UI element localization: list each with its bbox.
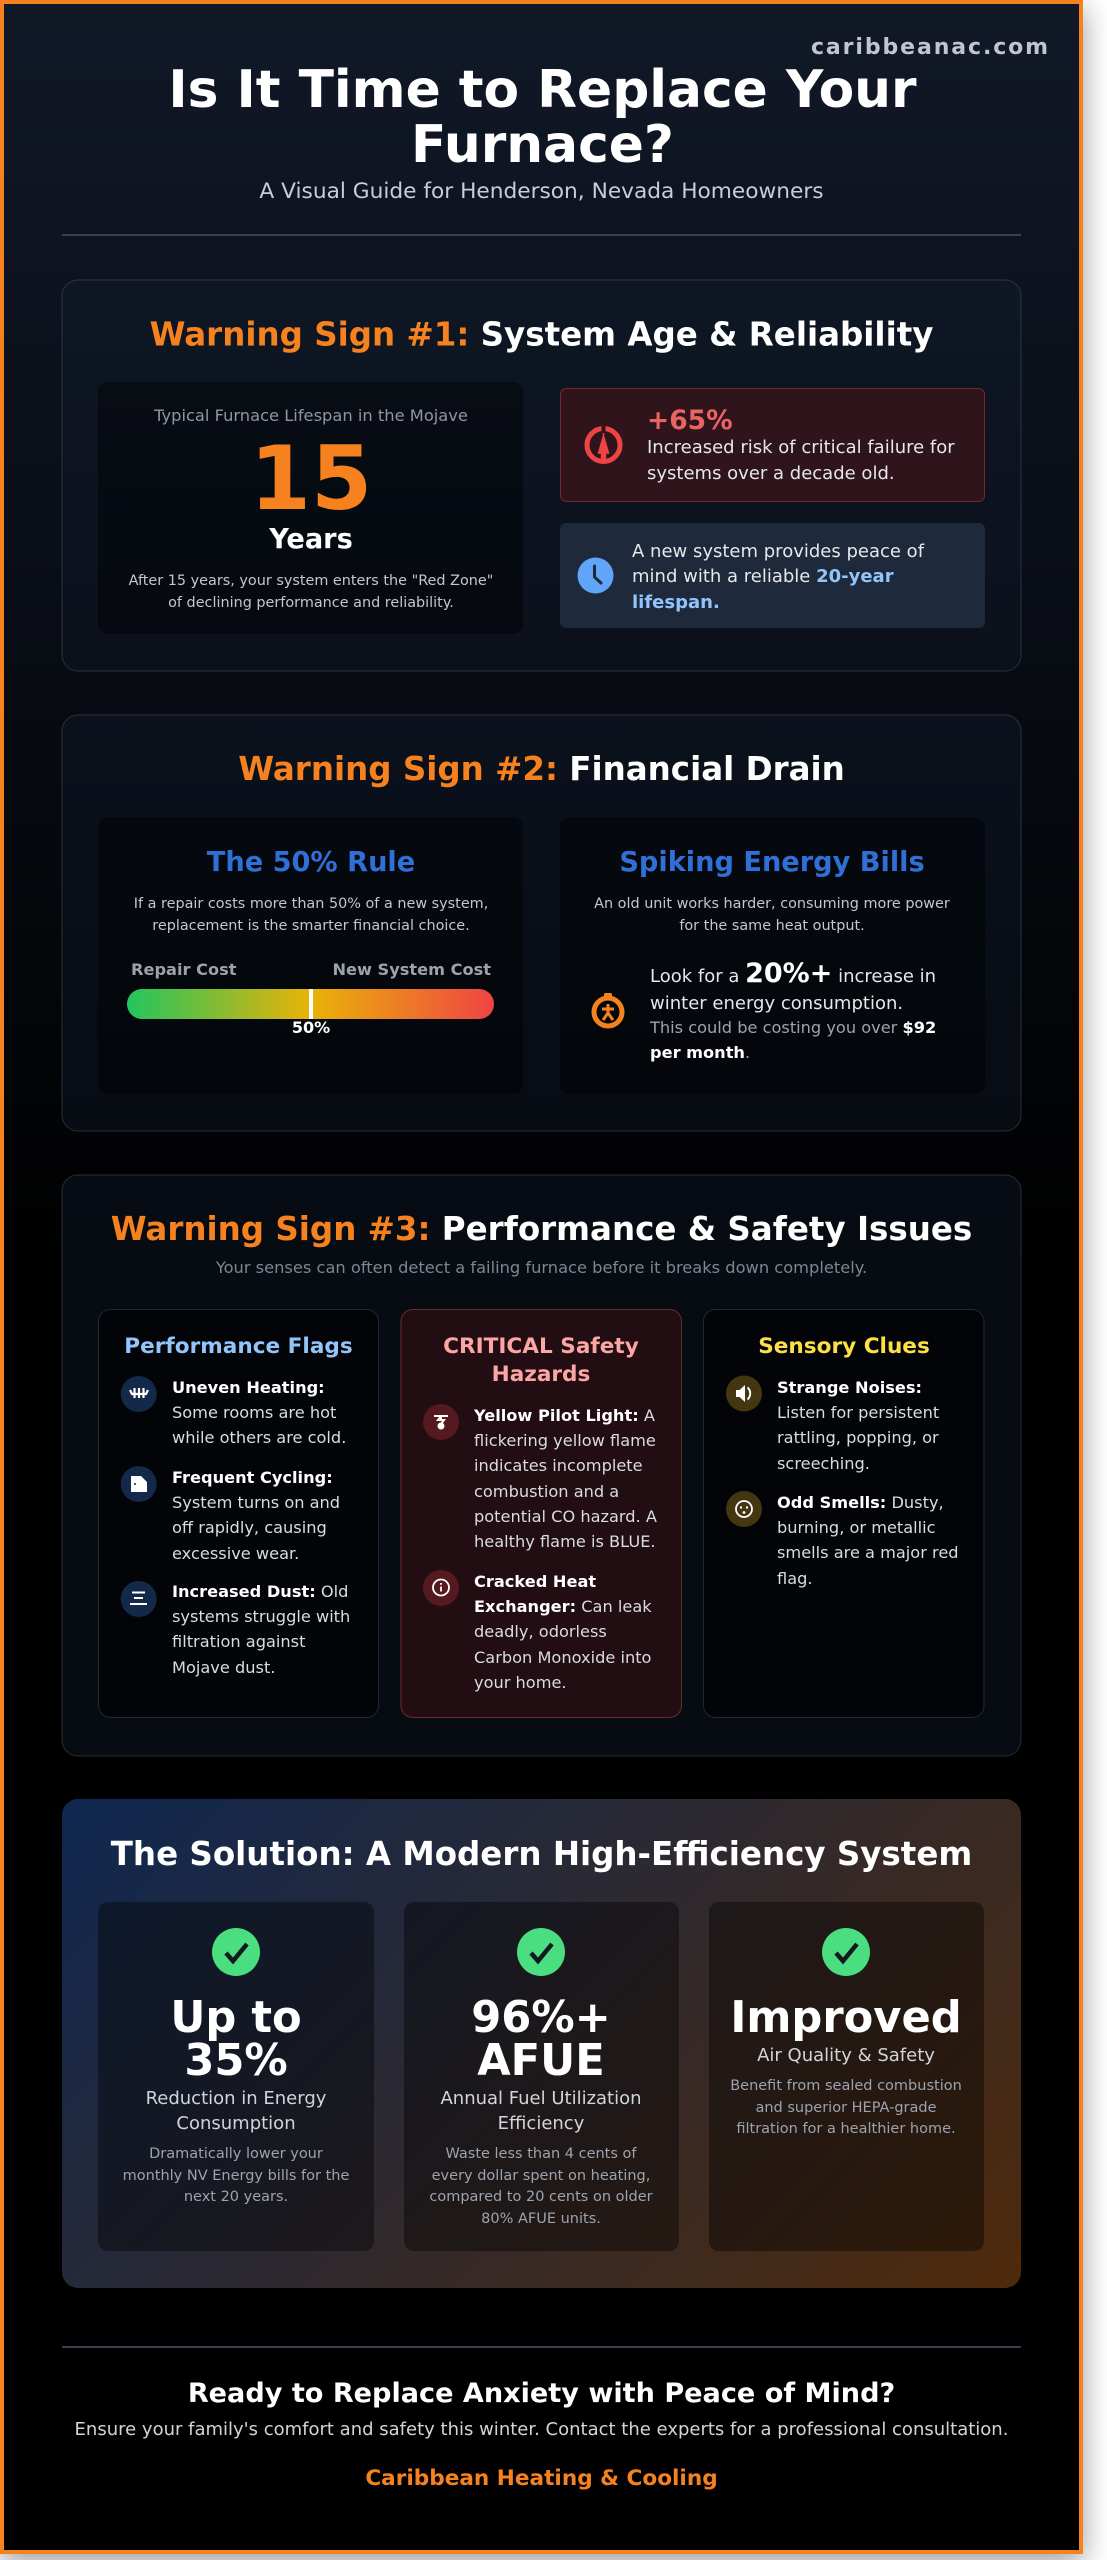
card: furnace lifespan: Years	[268, 524, 353, 555]
card: AFUE: 96%+	[471, 1993, 611, 2043]
item: odd smells: Odd Smells: Dusty,	[777, 1493, 944, 1512]
item: uneven heating: while others are cold.	[172, 1428, 346, 1447]
card: AFUE: Annual Fuel Utilization	[440, 2088, 642, 2109]
item: yellow pilot light: flickering yellow flame	[474, 1431, 656, 1450]
heading: warning sign 1: Warning Sign #1: System Age & Reliability	[150, 316, 933, 354]
card: performance flags	[98, 1310, 378, 1718]
card: furnace lifespan	[98, 382, 523, 634]
big number 15: 15	[250, 427, 372, 530]
heading: warning sign 3: Warning Sign #3: Performance & Safety Issues	[111, 1210, 972, 1248]
item: frequent cycling: Frequent Cycling:	[172, 1468, 333, 1487]
icon: check	[822, 1928, 870, 1976]
card: AFUE	[404, 1902, 679, 2251]
card: critical safety hazards	[401, 1310, 682, 1718]
item: increased dust: filtration against	[172, 1632, 305, 1651]
card: spiking energy bills	[560, 817, 985, 1094]
item: increased dust	[121, 1581, 350, 1677]
item: frequent cycling: off rapidly, causing	[172, 1518, 327, 1537]
item: cracked heat exchanger: Exchanger: Can leak	[474, 1597, 652, 1616]
item: increased dust: Mojave dust.	[172, 1658, 275, 1677]
item: odd smells: burning, or metallic	[777, 1518, 936, 1537]
card: energy reduction: Reduction in Energy	[146, 2088, 327, 2109]
footer call to action: Ensure your family's comfort and safety this winter. Contact the experts for a professional consultation.	[75, 2419, 1008, 2440]
card: performance flags: Performance Flags	[124, 1334, 353, 1359]
card: energy reduction: Up to	[170, 1993, 302, 2043]
callout: 20-year lifespan	[560, 523, 985, 628]
card: AFUE: AFUE	[477, 2036, 605, 2086]
card: spiking energy bills: An old unit works harder, consuming more power	[594, 896, 950, 912]
item: yellow pilot light: potential CO hazard. A	[474, 1507, 657, 1526]
item: strange noises: Listen for persistent	[777, 1403, 939, 1422]
card: spiking energy bills: per month.	[650, 1043, 750, 1062]
card: energy reduction	[98, 1902, 374, 2251]
item: yellow pilot light: indicates incomplete	[474, 1456, 643, 1475]
item: frequent cycling	[121, 1466, 340, 1563]
cost bar chart: Repair Cost	[131, 960, 237, 979]
item: yellow pilot light: combustion and a	[474, 1482, 619, 1501]
card: AFUE: every dollar spent on heating,	[432, 2168, 650, 2184]
card: air quality: and superior HEPA-grade	[755, 2100, 937, 2116]
cost bar chart: 50%	[292, 1018, 330, 1037]
card: air quality: Improved	[730, 1993, 962, 2043]
item: odd smells: smells are a major red	[777, 1543, 959, 1562]
item: odd smells: flag.	[777, 1569, 813, 1588]
item: frequent cycling: excessive wear.	[172, 1544, 299, 1563]
footer call to action	[75, 2378, 1008, 2491]
icon: check	[212, 1928, 260, 1976]
website label: caribbeanac.com	[811, 35, 1050, 60]
heading: warning sign 2: Warning Sign #2: Financial Drain	[238, 750, 845, 788]
panel: warning sign 2	[62, 715, 1021, 1131]
item: cracked heat exchanger: deadly, odorless	[474, 1622, 607, 1641]
card: energy reduction: Dramatically lower your	[149, 2146, 323, 2162]
item: strange noises	[726, 1376, 939, 1473]
item: cracked heat exchanger	[423, 1570, 652, 1692]
card: the 50% rule	[98, 817, 523, 1094]
callout: +65% failure risk: systems over a decade old.	[647, 463, 895, 484]
card: air quality	[709, 1902, 984, 2251]
card: air quality: Benefit from sealed combustion	[730, 2078, 962, 2094]
card: AFUE: 80% AFUE units.	[481, 2211, 601, 2227]
panel: warning sign 1	[62, 280, 1021, 671]
footer call to action: Ready to Replace Anxiety with Peace of Mind?	[188, 2378, 895, 2409]
panel: warning sign 3	[62, 1175, 1021, 1756]
card: AFUE: compared to 20 cents on older	[429, 2189, 653, 2205]
item: uneven heating	[121, 1376, 346, 1447]
card: the 50% rule: The 50% Rule	[207, 847, 415, 878]
item: cracked heat exchanger: your home.	[474, 1673, 567, 1692]
card: AFUE: Waste less than 4 cents of	[445, 2146, 637, 2162]
card: spiking energy bills: Look for a 20%+ increase in	[650, 958, 936, 989]
icon: check	[517, 1928, 565, 1976]
item: increased dust: Increased Dust: Old	[172, 1582, 348, 1601]
card: furnace lifespan: After 15 years, your system enters the "Red Zone"	[129, 573, 493, 589]
company name: Caribbean Heating & Cooling	[365, 2466, 718, 2491]
item: yellow pilot light: Yellow Pilot Light: A	[473, 1406, 655, 1425]
item: odd smells	[726, 1491, 959, 1588]
subtitle: A Visual Guide for Henderson, Nevada Homeowners	[259, 179, 824, 204]
callout: 20-year lifespan: A new system provides peace of	[632, 541, 925, 562]
card: spiking energy bills: This could be costing you over $92	[649, 1018, 936, 1037]
callout: +65% failure risk: +65%	[647, 405, 733, 436]
callout: +65% failure risk	[560, 388, 984, 502]
item: yellow pilot light	[423, 1404, 657, 1551]
heading: the solution: The Solution: A Modern High-Efficiency System	[111, 1835, 972, 1873]
card: furnace lifespan: Typical Furnace Lifespan in the Mojave	[153, 406, 468, 425]
card: the 50% rule: replacement is the smarter financial choice.	[152, 918, 470, 934]
card: spiking energy bills: Spiking Energy Bills	[619, 847, 925, 878]
card: sensory clues: Sensory Clues	[758, 1334, 930, 1359]
item: uneven heating: Some rooms are hot	[172, 1403, 336, 1422]
item: strange noises: rattling, popping, or	[777, 1428, 939, 1447]
card: energy reduction: Consumption	[176, 2113, 296, 2134]
title: Furnace?	[411, 115, 674, 175]
cost bar chart: New System Cost	[332, 960, 491, 979]
callout: +65% failure risk: Increased risk of critical failure for	[647, 437, 955, 458]
item: increased dust: systems struggle with	[172, 1607, 350, 1626]
item: strange noises: screeching.	[777, 1454, 870, 1473]
item: yellow pilot light: healthy flame is BLUE.	[474, 1532, 656, 1551]
card: energy reduction: next 20 years.	[184, 2189, 288, 2205]
card: energy reduction: 35%	[184, 2036, 288, 2086]
card: spiking energy bills: winter energy consumption.	[650, 993, 903, 1014]
panel: the solution	[62, 1799, 1021, 2288]
card: critical safety hazards: CRITICAL Safety	[443, 1334, 639, 1359]
icon: clock	[578, 558, 614, 594]
callout: 20-year lifespan: lifespan.	[632, 592, 720, 613]
item: uneven heating: Uneven Heating:	[172, 1378, 325, 1397]
card: air quality: filtration for a healthier home.	[736, 2121, 956, 2137]
icon: meter	[594, 993, 622, 1026]
card: sensory clues	[704, 1310, 984, 1718]
item: frequent cycling: System turns on and	[172, 1493, 340, 1512]
callout: 20-year lifespan: mind with a reliable 20-year	[632, 566, 894, 587]
item: cracked heat exchanger: Carbon Monoxide into	[474, 1648, 652, 1667]
card: spiking energy bills: for the same heat output.	[679, 918, 865, 934]
card: energy reduction: monthly NV Energy bills for the	[123, 2168, 349, 2184]
item: strange noises: Strange Noises:	[777, 1378, 922, 1397]
card: AFUE: Efficiency	[498, 2113, 585, 2134]
icon: gauge	[587, 424, 620, 462]
title	[168, 60, 917, 175]
card: air quality: Air Quality & Safety	[757, 2045, 935, 2066]
section intro: Your senses can often detect a failing furnace before it breaks down completely.	[215, 1258, 867, 1277]
card: critical safety hazards: Hazards	[492, 1362, 590, 1387]
card: the 50% rule: If a repair costs more than 50% of a new system,	[134, 896, 488, 912]
cost bar chart	[127, 960, 494, 1037]
card: furnace lifespan: of declining performance and reliability.	[168, 595, 454, 611]
item: cracked heat exchanger: Cracked Heat	[474, 1572, 596, 1591]
title: Is It Time to Replace Your	[168, 60, 917, 120]
